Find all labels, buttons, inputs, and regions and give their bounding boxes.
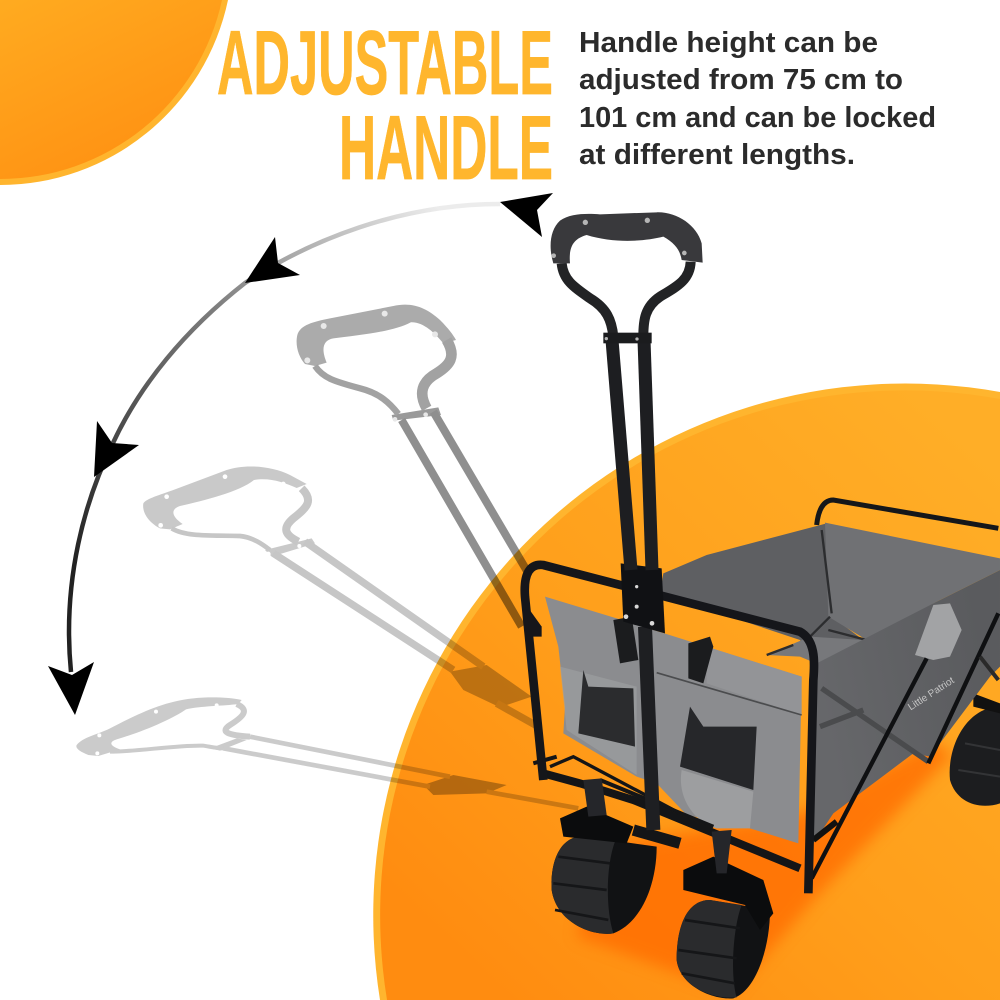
side pillow xyxy=(915,603,962,660)
wagon xyxy=(525,500,1000,998)
interior base xyxy=(660,523,863,667)
side x-frame xyxy=(812,613,998,878)
front panel light band xyxy=(707,647,802,715)
description text: Handle height can be xyxy=(579,27,878,59)
description text: 101 cm and can be locked xyxy=(579,102,936,134)
rear wheel xyxy=(950,693,1000,806)
chassis bars xyxy=(533,757,800,868)
ghost handle: position 3 (lowest) xyxy=(76,697,578,808)
title: HANDLE xyxy=(339,98,553,199)
front panel xyxy=(545,597,802,843)
corner orange circle xyxy=(0,0,228,185)
brand label: Little Patriot xyxy=(906,675,957,713)
ghost handle: position 2 xyxy=(143,466,538,727)
description text: adjusted from 75 cm to xyxy=(579,64,903,96)
handle lower shaft xyxy=(645,627,653,830)
handle upper shafts xyxy=(612,340,652,570)
front wheel right xyxy=(677,830,773,998)
front wheel left xyxy=(552,778,657,934)
front frame arch xyxy=(525,565,814,893)
ghost handle: position 1 xyxy=(297,305,528,627)
curved motion arrow xyxy=(48,193,553,715)
handle lock bracket xyxy=(621,563,665,633)
description text: at different lengths. xyxy=(579,139,855,171)
straps xyxy=(613,617,713,683)
main handle xyxy=(551,212,703,343)
title xyxy=(217,13,553,199)
mesh pocket right xyxy=(680,707,757,790)
mesh pocket left xyxy=(578,670,635,747)
fabric pouch xyxy=(681,770,753,828)
large orange circle xyxy=(373,383,1000,1000)
wagon ground shadow xyxy=(577,740,997,993)
side panel xyxy=(813,570,1000,843)
far rail xyxy=(817,500,998,528)
description text xyxy=(579,27,936,171)
interior floor xyxy=(767,637,863,665)
title: ADJUSTABLE xyxy=(217,13,553,114)
interior right panel xyxy=(825,523,1000,640)
